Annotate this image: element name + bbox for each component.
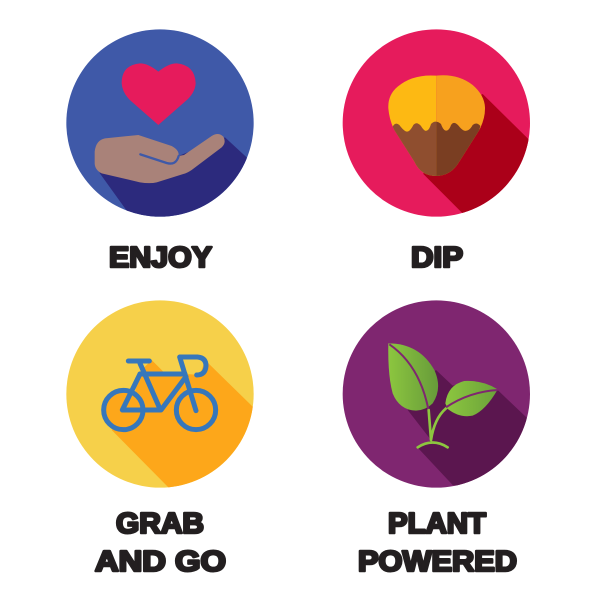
heading: PLANT POWERED [358,508,517,578]
icon: dipped treat [388,75,485,176]
heading: PLANT POWERED: POWERED [358,546,517,578]
icon: bicycle [104,357,216,430]
heading: GRAB AND GO: AND GO [95,546,226,578]
heading: GRAB AND GO [95,508,226,578]
circle background: grab and go [66,300,254,488]
heading: PLANT POWERED: PLANT [388,508,486,540]
panel: grab and go icon [66,300,254,488]
long shadow: hand [100,138,247,217]
icon: plant [388,343,498,447]
long shadow: dipped treat [423,94,528,213]
panel: enjoy icon [66,29,254,217]
long shadow: bicycle [106,360,253,488]
heading: DIP: DIP [411,242,463,274]
large leaf [388,343,438,411]
small leaf [445,381,498,416]
icon: heart [122,63,196,125]
stems and ground line [418,408,448,447]
long shadow: plant [408,370,527,486]
panel: dip icon [342,29,530,217]
circle background: enjoy [66,29,254,217]
heading: GRAB AND GO: GRAB [116,508,204,540]
heading: ENJOY: ENJOY [109,242,212,274]
icon: open hand [95,134,225,183]
circle background: dip [343,29,530,217]
panel: plant powered icon [342,300,530,488]
circle background: plant powered [343,300,530,488]
